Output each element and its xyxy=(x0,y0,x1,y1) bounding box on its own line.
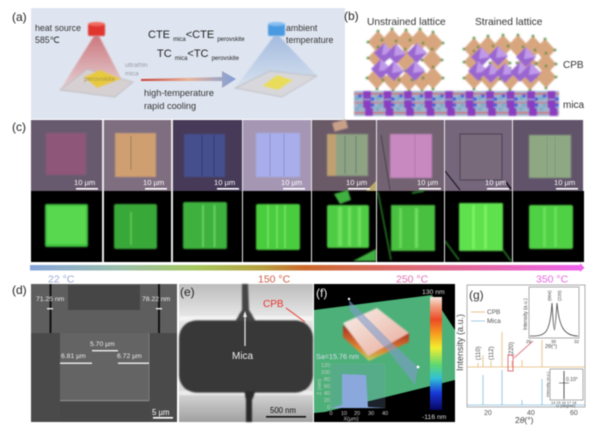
peak labels: (110) xyxy=(476,346,482,360)
peak labels: (112) xyxy=(489,346,495,360)
inset height profile: 20 xyxy=(354,411,360,417)
TC relation: <TC xyxy=(187,48,212,60)
arrow: cooling xyxy=(141,71,236,88)
scale bars: 10 µm xyxy=(417,178,438,187)
inset height profile: 40 xyxy=(382,411,388,417)
legend: CPB xyxy=(487,309,500,316)
inset height profile: 0 xyxy=(329,411,333,417)
colour min label: -116 nm xyxy=(422,414,447,421)
fluorescence images xyxy=(45,190,573,261)
optical image 3 xyxy=(173,120,242,191)
inset height profile xyxy=(317,363,388,422)
left width: 6.81 µm xyxy=(61,353,86,360)
optical image 5 xyxy=(312,119,376,191)
inset height profile: 40 xyxy=(324,391,330,397)
colour max label: 130 nm xyxy=(422,289,445,296)
mica label: mica xyxy=(563,100,585,111)
ambient label: ambient xyxy=(286,23,317,33)
panel label a: (a) xyxy=(12,10,27,24)
x axis ticks xyxy=(484,410,578,417)
inset: rocking curve: Intensity (a.u.) xyxy=(545,371,550,397)
inset: rocking curve: 0.10° xyxy=(566,377,578,383)
panel: microscope image grid xyxy=(31,119,584,262)
CPB label: CPB xyxy=(563,60,584,71)
panel label d: (d) xyxy=(12,283,27,297)
peak labels xyxy=(476,342,515,360)
scale bars: 10 µm xyxy=(281,178,302,187)
scale bars xyxy=(74,178,578,190)
panel label f: (f) xyxy=(316,286,327,300)
inset: peak split: 2θ(°) xyxy=(545,344,557,350)
heat cone and mica substrate xyxy=(60,36,133,97)
icon: heat source cylinder xyxy=(88,22,105,36)
inset: peak split: Intensity (a.u.) xyxy=(523,298,529,330)
optical image 4 xyxy=(243,120,311,191)
inset: peak split: 30 xyxy=(551,339,557,344)
profile blade xyxy=(349,300,418,385)
cold cone and device xyxy=(235,36,317,97)
optical image 6 xyxy=(377,120,444,191)
scale bars: 10 µm xyxy=(346,178,367,187)
scale bars: 10 µm xyxy=(74,178,95,187)
x axis ticks: 40 xyxy=(527,410,535,417)
ultrathin mica label: ultrathin xyxy=(125,62,148,69)
highlight box and arrow xyxy=(508,341,533,371)
roughness label: Sa=15.76 nm xyxy=(316,352,359,361)
inset: rocking curve: 14 15 16 17 18 xyxy=(551,401,576,405)
heading unstrained: Unstrained lattice xyxy=(367,17,446,28)
strained lattice xyxy=(463,34,557,91)
TC relation: mica xyxy=(175,56,188,62)
inset height profile: 10 xyxy=(341,411,347,417)
mica lattice xyxy=(354,91,559,116)
inset height profile: 120 xyxy=(321,363,330,369)
panel label e: (e) xyxy=(180,285,195,299)
label 22 C: 22 °C xyxy=(48,274,75,286)
CTE relation: mica xyxy=(173,37,186,43)
panel: TEM image e xyxy=(179,284,313,422)
gap width right: 78.22 nm xyxy=(142,296,171,303)
mica arrow xyxy=(243,311,247,346)
mica trace xyxy=(467,370,585,405)
inset height profile: 60 xyxy=(324,384,330,390)
cooling label: high-temperature xyxy=(144,88,214,98)
panel label b: (b) xyxy=(344,9,359,23)
y axis title: Intensity (a.u.) xyxy=(455,314,465,371)
temperature gradient arrow xyxy=(30,263,584,272)
panel: AFM image f xyxy=(314,284,455,422)
label 350 C: 350 °C xyxy=(536,274,569,286)
white gutters xyxy=(102,120,513,262)
x axis title: 2θ(°) xyxy=(515,415,534,425)
optical image 1 xyxy=(31,120,102,191)
inset: peak split: (220) xyxy=(557,290,562,301)
label 150 C: 150 °C xyxy=(258,274,291,286)
label 250 C: 250 °C xyxy=(396,274,429,286)
heading strained: Strained lattice xyxy=(475,17,543,28)
temperature label: 585℃ xyxy=(35,35,60,45)
colour scale xyxy=(430,297,442,410)
peak labels: (220) xyxy=(509,342,515,356)
CPB callout: CPB xyxy=(263,299,284,310)
scale bars: 10 µm xyxy=(554,178,575,187)
inset height profile: 0 xyxy=(327,405,330,411)
ambient label: temperature xyxy=(286,35,334,45)
right width: 6.72 µm xyxy=(117,353,142,360)
inset height profile: 80 xyxy=(324,377,330,383)
inset height profile: 100 xyxy=(321,370,330,376)
x axis ticks: 20 xyxy=(484,410,492,417)
scale bar: 500 nm xyxy=(270,406,296,415)
inset height profile: 30 xyxy=(368,411,374,417)
optical image 2 xyxy=(104,120,171,191)
legend xyxy=(471,309,501,325)
inset: peak split: 32 xyxy=(574,339,580,344)
CTE relation: perovskite xyxy=(217,37,245,43)
AFM platelet xyxy=(343,308,409,361)
gap width left: 71.25 nm xyxy=(36,296,65,303)
optical image 7 xyxy=(445,120,512,191)
panel: XRD chart g xyxy=(455,285,585,425)
heat source label: heat source xyxy=(35,23,81,33)
CTE relation: CTE xyxy=(148,29,170,41)
scale bars: 10 µm xyxy=(485,178,506,187)
cooling label: rapid cooling xyxy=(144,101,196,111)
panel: SEM image xyxy=(31,284,177,422)
panel: thermal process schematic xyxy=(31,8,345,119)
inset: rocking curve xyxy=(545,369,583,408)
inset: peak split: (004) xyxy=(547,290,552,301)
perovskite label: perovskite xyxy=(84,76,115,83)
center width: 5.70 µm xyxy=(90,341,115,348)
legend: Mica xyxy=(487,318,501,325)
panel label c: (c) xyxy=(12,120,26,134)
x axis ticks: 60 xyxy=(570,410,578,417)
ultrathin mica label: mica xyxy=(125,70,139,78)
icon: ambient cylinder xyxy=(268,22,285,36)
scale label: 5 µm xyxy=(152,408,170,417)
inset height profile: X(µm) xyxy=(343,416,359,422)
inset: peak split xyxy=(523,287,580,350)
inset: rocking curve: ω (degree) xyxy=(556,403,576,408)
inset height profile: Z (nm) xyxy=(317,379,323,395)
CTE relation: <CTE xyxy=(186,29,217,41)
inset height profile: 20 xyxy=(324,398,330,404)
TC relation: TC xyxy=(157,48,172,60)
unstrained lattice xyxy=(366,28,444,92)
optical image 8 xyxy=(513,120,583,191)
inset: peak split: 29 xyxy=(526,339,532,344)
panel: lattice xyxy=(354,17,585,116)
CPB trace xyxy=(467,332,585,367)
scale bars: 10 µm xyxy=(143,178,164,187)
scale bars: 10 µm xyxy=(214,178,235,187)
panel label g: (g) xyxy=(469,288,484,302)
mica label: Mica xyxy=(232,351,254,362)
TC relation: perovskite xyxy=(212,56,240,62)
